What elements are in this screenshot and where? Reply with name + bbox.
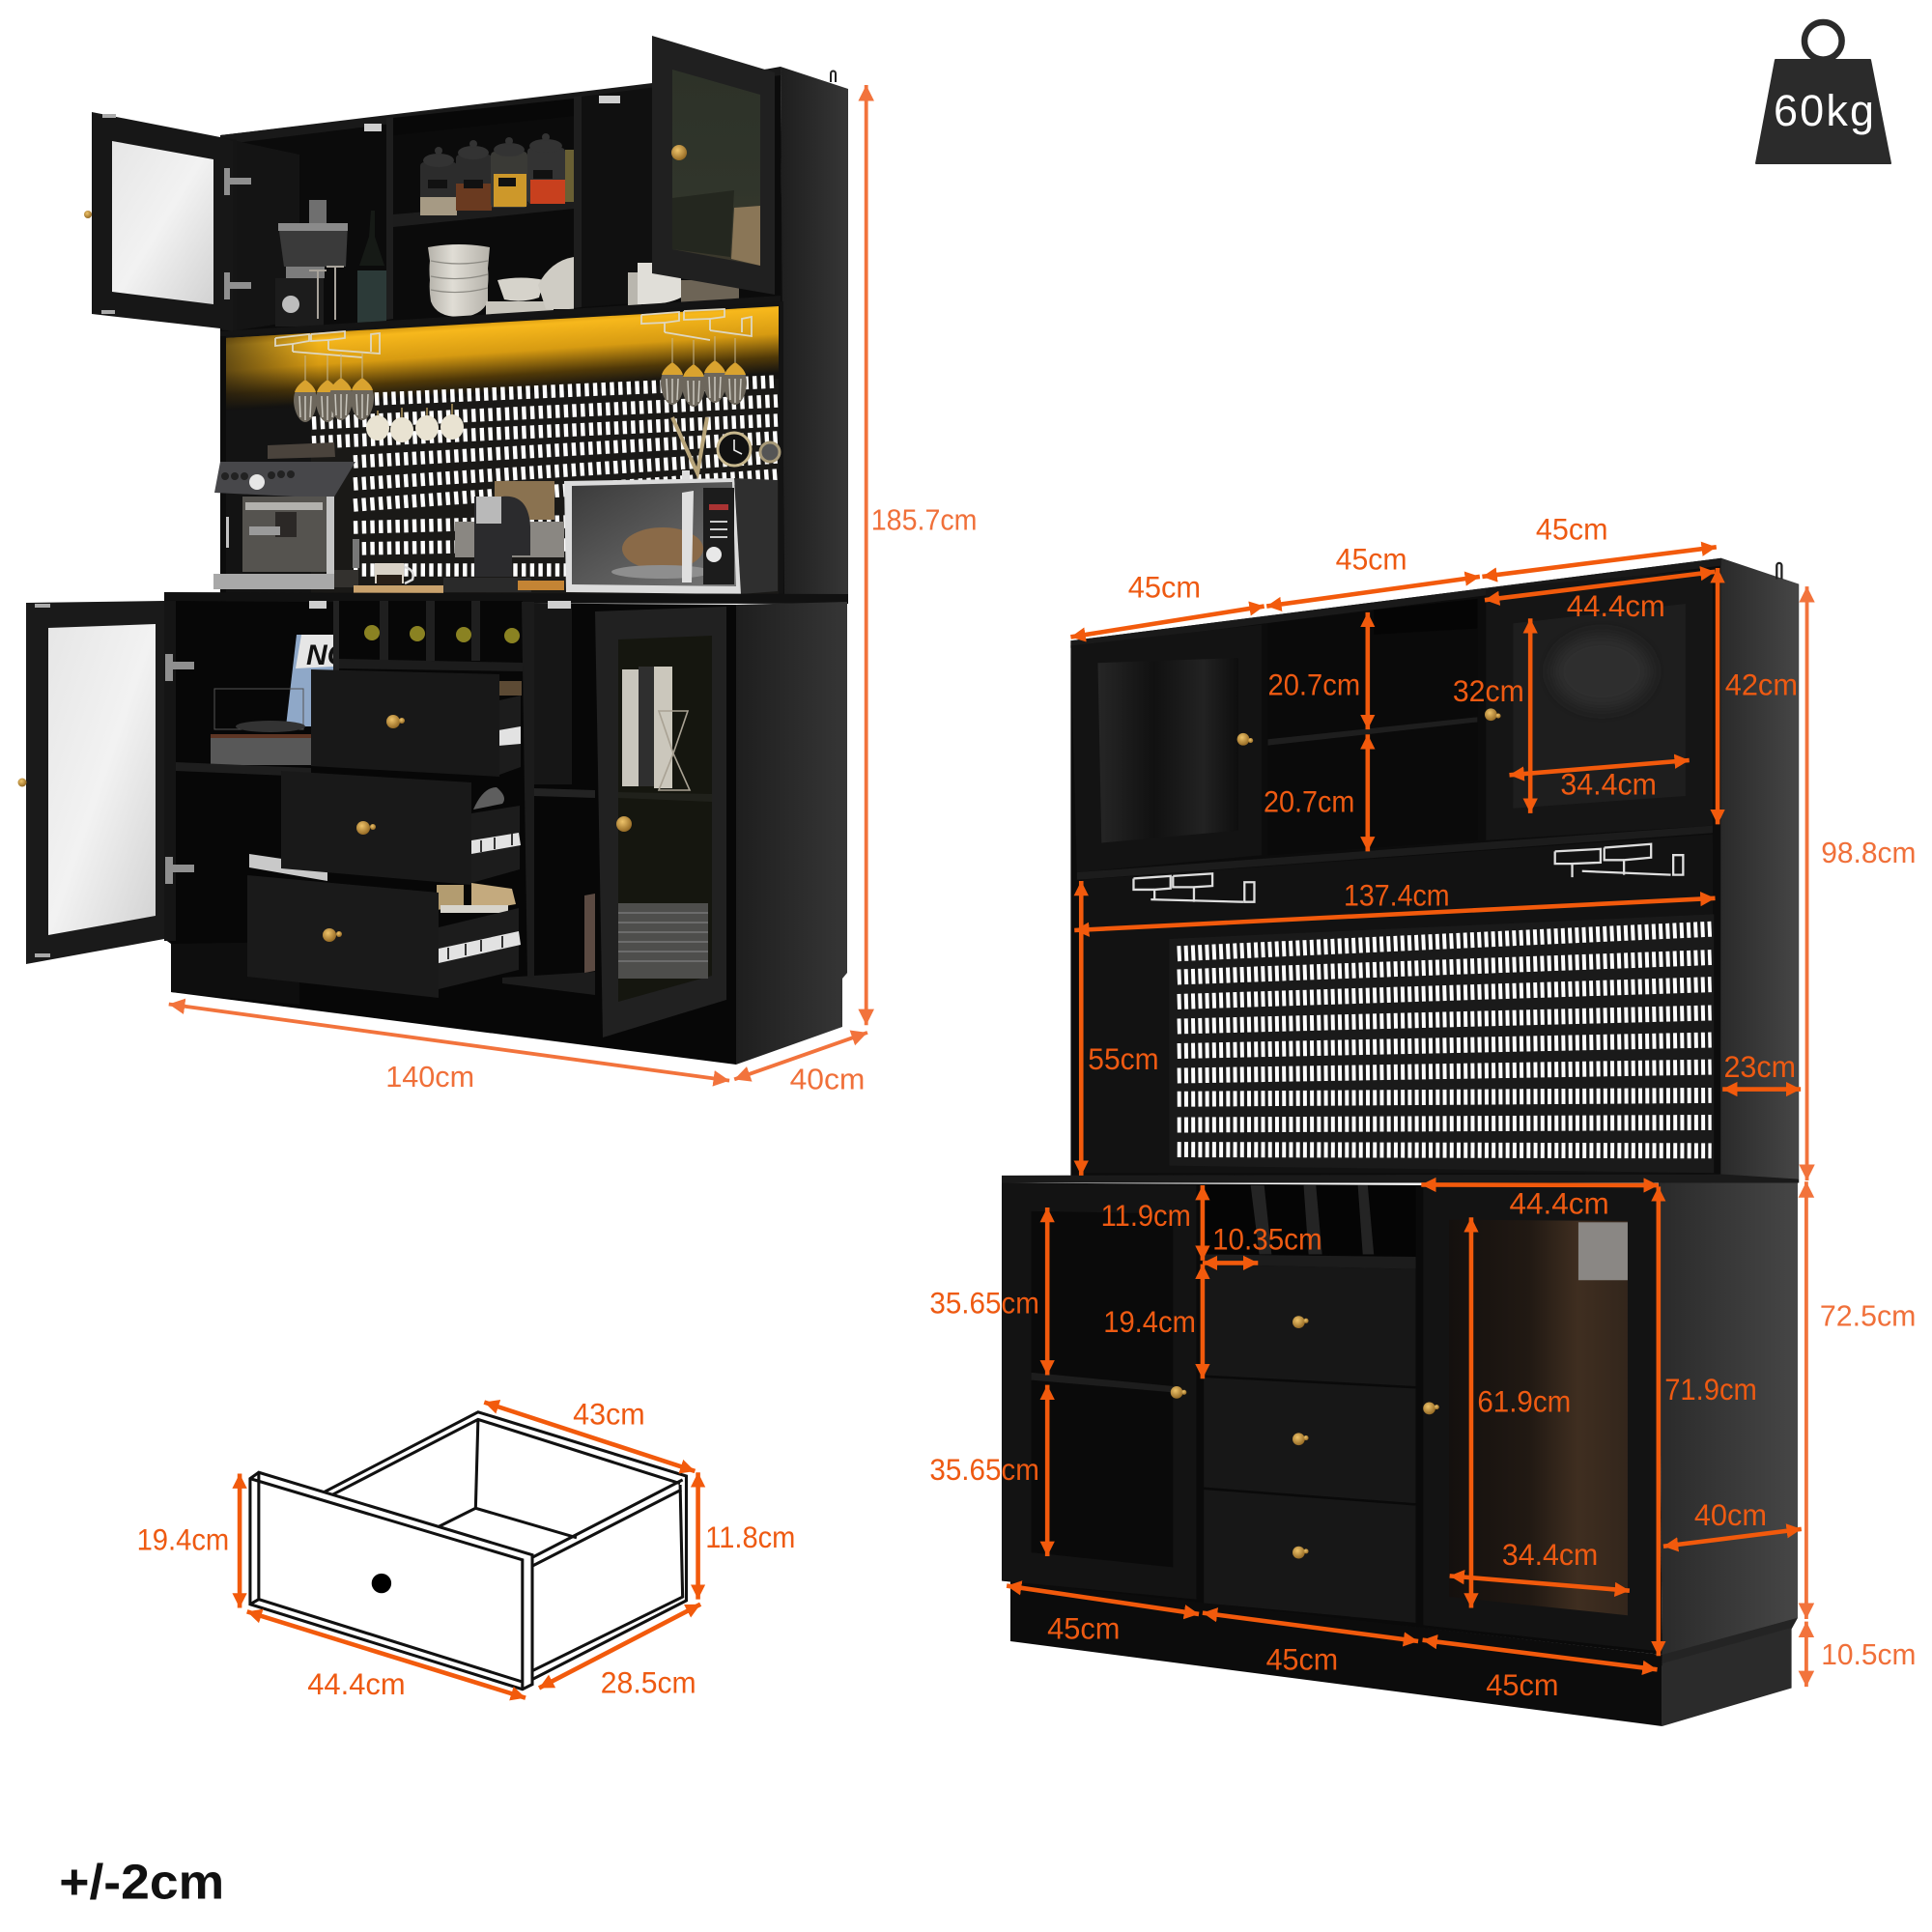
dimension: lower shelf height 20.7cm xyxy=(1264,734,1368,851)
lower hinges xyxy=(165,654,194,884)
upper left glass door xyxy=(1070,625,1262,872)
lower hutch and LED strip xyxy=(220,301,783,599)
dimension: drawer front height 19.4cm xyxy=(137,1474,240,1608)
turntable and magazine on shelf xyxy=(176,635,350,881)
lower cabinet body and side xyxy=(164,592,848,604)
upper right glass door xyxy=(1485,569,1713,840)
wine cubbies xyxy=(1204,1185,1416,1269)
weight capacity icon: 60kg xyxy=(1774,86,1874,135)
dimension: lower depth 40cm: 40cm xyxy=(1694,1498,1767,1532)
dimension: cubby height 11.9cm xyxy=(1101,1185,1203,1261)
dimension: overall width 140cm xyxy=(169,1005,729,1094)
dimension: upper door width 44.4cm xyxy=(1485,572,1716,623)
dimension: upper shelf height 20.7cm xyxy=(1267,612,1368,729)
dimension: inner width 137.4cm: 137.4cm xyxy=(1344,878,1450,912)
tolerance note: +/-2cm xyxy=(59,1855,224,1910)
lower left glass door xyxy=(1002,1182,1197,1600)
recess shelf xyxy=(1077,826,1713,880)
microwave oven xyxy=(564,478,778,594)
wine cubbies with corks xyxy=(333,601,523,671)
dimension: lower shelf height 20.7cm: 20.7cm xyxy=(1264,785,1354,819)
dimension: upper glass width 34.4cm: 34.4cm xyxy=(1560,768,1657,802)
white bowls and plates xyxy=(428,244,739,317)
open right lower glass door xyxy=(584,607,726,1037)
dimension: bottom right width 45cm: 45cm xyxy=(1486,1668,1559,1702)
open left lower glass door xyxy=(17,601,164,964)
dimension: top right width 45cm: 45cm xyxy=(1536,513,1608,547)
open upper left glass door xyxy=(84,112,251,331)
dimension: upper glass width 34.4cm xyxy=(1509,760,1690,802)
dimension: lower glass width 34.4cm xyxy=(1450,1538,1630,1591)
lower right glass door xyxy=(1423,1186,1659,1651)
dimension: plinth height 10.5cm xyxy=(1806,1622,1916,1687)
dimension: upper glass height 32cm: 32cm xyxy=(1453,674,1524,708)
dimension: top left width 45cm: 45cm xyxy=(1128,571,1201,605)
dimension: drawer back width 43cm: 43cm xyxy=(573,1397,645,1431)
dimension: plinth height 10.5cm: 10.5cm xyxy=(1821,1638,1916,1671)
dimension: lower glass height 61.9cm: 61.9cm xyxy=(1477,1385,1571,1419)
dimension: lower compartment height 35.65cm: 35.65cm xyxy=(929,1453,1039,1487)
dimension: bottom middle width 45cm: 45cm xyxy=(1266,1642,1338,1676)
open drawers xyxy=(247,669,522,998)
center column and shelf xyxy=(522,602,534,978)
kettle, book and counter items xyxy=(354,481,564,593)
dimension: hutch height 98.8cm: 98.8cm xyxy=(1821,837,1916,869)
drawer handle xyxy=(372,1574,391,1593)
wine glass racks xyxy=(275,309,752,357)
dimension: overall width 140cm: 140cm xyxy=(385,1061,474,1094)
espresso machine xyxy=(213,442,359,589)
dimension: drawer height 19.4cm: 19.4cm xyxy=(1103,1305,1196,1339)
dimension: cubby width 10.35cm: 10.35cm xyxy=(1212,1222,1322,1256)
hutch side panel xyxy=(781,67,848,601)
dimension: drawer side height 11.8cm xyxy=(698,1472,795,1600)
scissors and clock xyxy=(672,417,780,486)
counter and lower body xyxy=(1002,1175,1799,1182)
hutch front xyxy=(1070,558,1721,1179)
dimension: drawer side height 11.8cm: 11.8cm xyxy=(705,1520,795,1554)
dimension: drawer depth 28.5cm xyxy=(539,1605,700,1700)
upper shelf slab xyxy=(220,296,781,340)
dimension: lower body height 72.5cm: 72.5cm xyxy=(1820,1299,1916,1332)
dimension: top right width 45cm xyxy=(1482,513,1717,577)
dimension: lower door width 44.4cm: 44.4cm xyxy=(1509,1186,1609,1220)
dimension: lower door height 71.9cm: 71.9cm xyxy=(1664,1373,1757,1406)
hanging wine glasses xyxy=(294,336,747,422)
dimension: upper shelf height 20.7cm: 20.7cm xyxy=(1267,668,1360,701)
drawer outline xyxy=(250,1412,686,1690)
dimension: drawer front width 44.4cm xyxy=(247,1611,526,1701)
dimension: lower glass width 34.4cm: 34.4cm xyxy=(1502,1538,1598,1572)
dimension: overall depth 40cm: 40cm xyxy=(790,1064,865,1096)
dimension: drawer depth 28.5cm: 28.5cm xyxy=(601,1666,696,1700)
dimension: top left width 45cm xyxy=(1070,571,1264,637)
dimension: upper door height 42cm: 42cm xyxy=(1725,668,1798,701)
drawer fronts xyxy=(1204,1264,1416,1623)
hanging white cups xyxy=(366,404,464,442)
dimension: overall height 185.7cm: 185.7cm xyxy=(871,503,977,536)
dimension: top middle width 45cm xyxy=(1266,542,1480,607)
dimension: overall depth 40cm xyxy=(734,1033,867,1096)
open middle compartment with shelf xyxy=(1267,599,1477,855)
side panels xyxy=(1721,558,1799,1179)
dimension: bottom left width 45cm xyxy=(1007,1586,1199,1645)
drawer diagram xyxy=(137,1397,795,1701)
dimension: bottom middle width 45cm xyxy=(1203,1613,1418,1676)
pegboard xyxy=(1169,914,1714,1173)
open upper right glass door xyxy=(652,36,775,295)
pegboard with slots xyxy=(311,379,779,594)
dimension: upper door width 44.4cm: 44.4cm xyxy=(1567,589,1665,623)
dimension: bottom left width 45cm: 45cm xyxy=(1047,1611,1120,1645)
dimension: lower depth 40cm xyxy=(1663,1498,1802,1547)
dimension: drawer front height 19.4cm: 19.4cm xyxy=(137,1523,229,1557)
dimension: cubby height 11.9cm: 11.9cm xyxy=(1101,1199,1191,1233)
dimension: counter clearance 55cm: 55cm xyxy=(1088,1042,1159,1076)
dimension: hutch depth 23cm: 23cm xyxy=(1723,1050,1796,1084)
food processor and bottle xyxy=(275,200,386,327)
left cabinet: styled kitchen hutch with open doors xyxy=(17,36,848,1065)
dimension: bottom right width 45cm xyxy=(1423,1640,1658,1702)
dimension: drawer height 19.4cm xyxy=(1103,1264,1203,1378)
spice jars xyxy=(420,133,574,215)
upper compartments xyxy=(220,70,781,333)
dimension: inner width 137.4cm xyxy=(1074,878,1716,930)
dimension: top middle width 45cm: 45cm xyxy=(1336,542,1407,576)
weight capacity icon xyxy=(1756,22,1890,163)
dimension: drawer front width 44.4cm: 44.4cm xyxy=(307,1667,406,1701)
right cabinet: front view xyxy=(1002,558,1799,1726)
wine glass racks xyxy=(1133,844,1683,902)
turntable and magazine on shelf: NO xyxy=(306,639,350,671)
dimension: upper compartment height 35.65cm: 35.65cm xyxy=(929,1287,1039,1321)
drawer knobs xyxy=(323,715,405,942)
dimension: drawer back width 43cm xyxy=(484,1397,695,1471)
